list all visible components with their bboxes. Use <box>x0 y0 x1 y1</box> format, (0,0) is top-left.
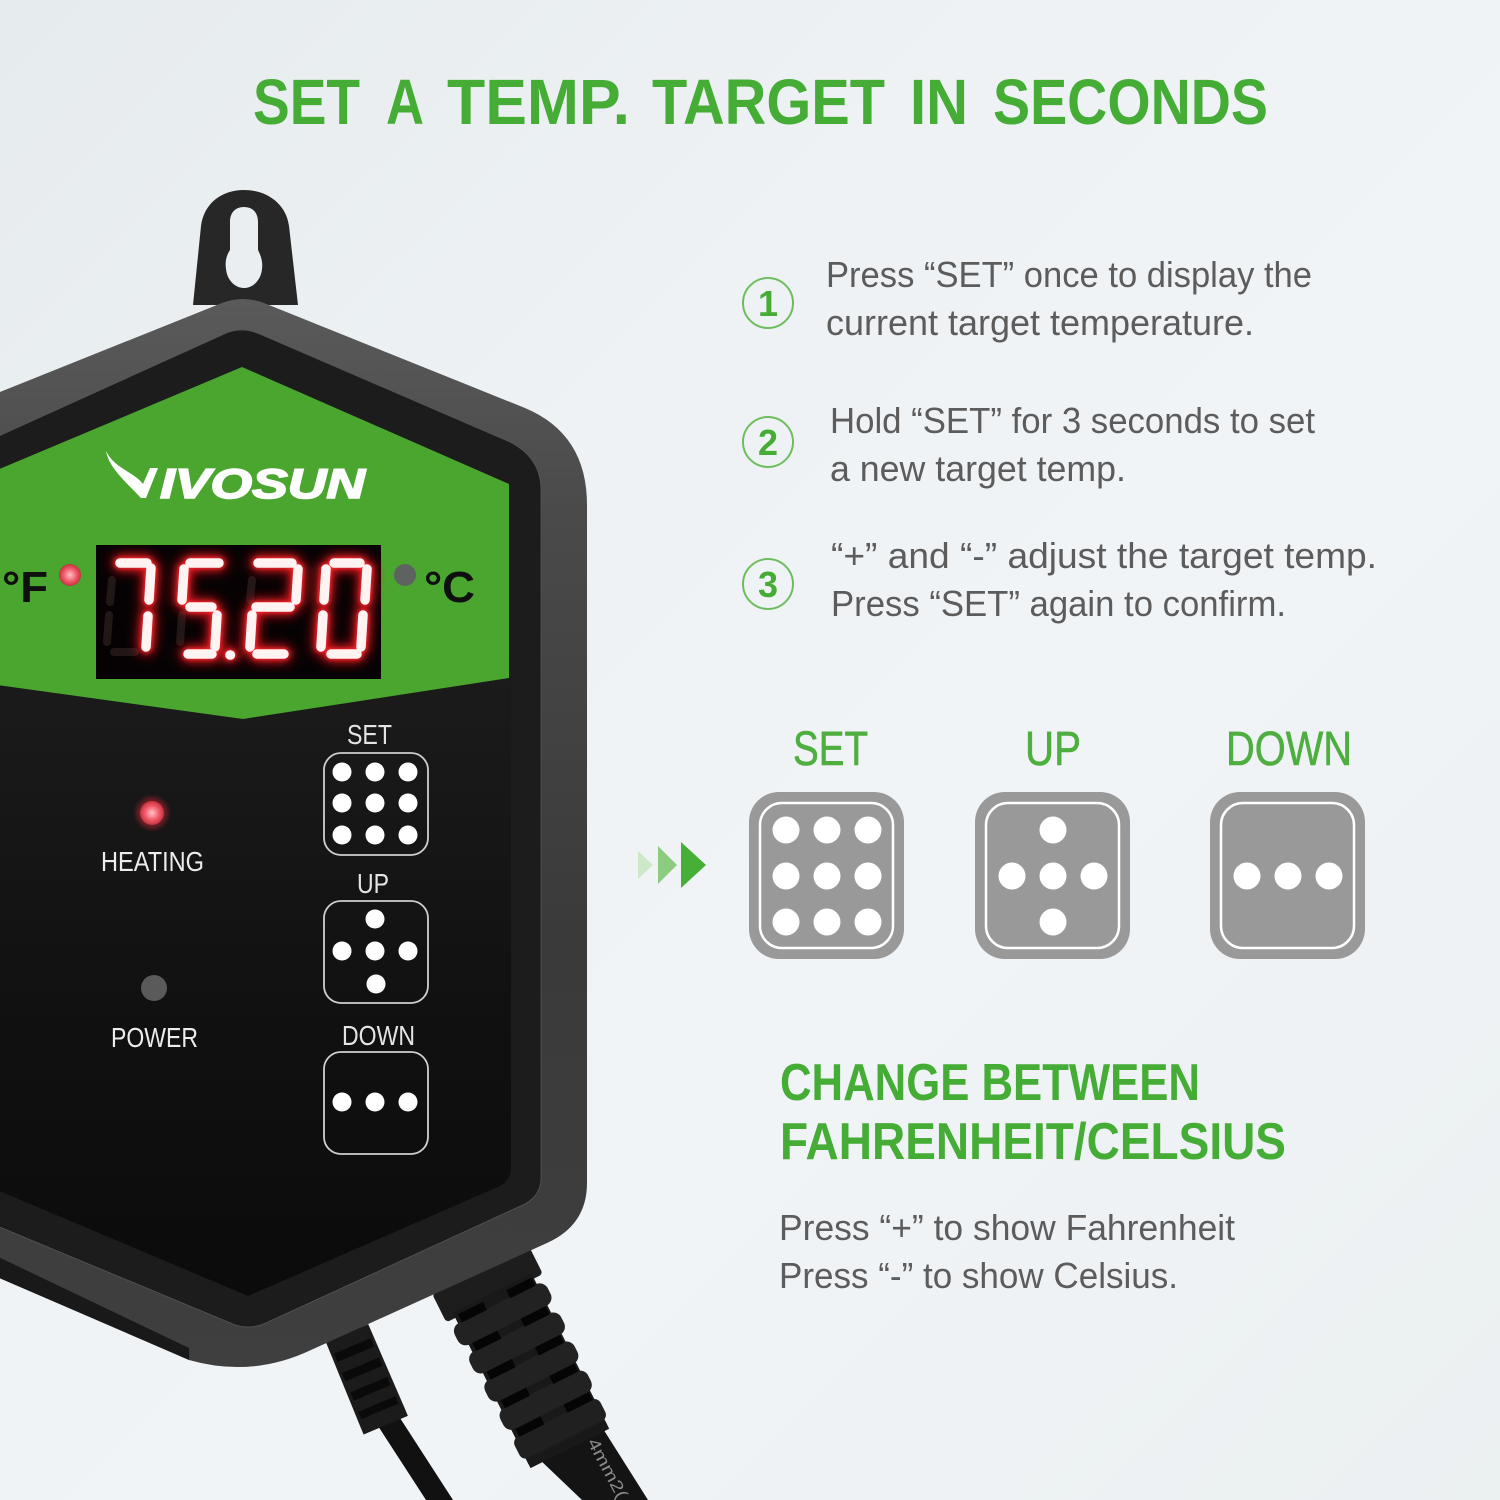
celsius unit: °C <box>424 563 475 612</box>
step 2 text: Hold “SET” for 3 seconds to set <box>830 400 1315 441</box>
step 3 text: Press “SET” again to confirm. <box>831 583 1286 624</box>
dark bezel <box>0 330 541 1327</box>
title: TARGET <box>652 66 885 138</box>
heating led <box>136 797 168 829</box>
black face <box>0 640 511 1296</box>
celsius led <box>394 564 416 586</box>
title: SET <box>253 66 360 138</box>
step 2 text: a new target temp. <box>830 448 1126 489</box>
power label: POWER <box>111 1022 198 1053</box>
cable marking: 4mm2( <box>583 1435 631 1500</box>
fahrenheit led <box>59 564 81 586</box>
heading: change units: FAHRENHEIT/CELSIUS <box>780 1113 1286 1171</box>
small cable <box>325 1324 453 1500</box>
up button icon <box>975 792 1130 959</box>
device up button <box>324 901 428 1003</box>
up caption: UP <box>1025 723 1081 776</box>
step 3 badge <box>743 559 793 609</box>
set caption: SET <box>793 723 868 776</box>
unit instructions: Press “+” to show Fahrenheit <box>779 1207 1235 1248</box>
device: thermostat controller <box>0 190 648 1500</box>
set button icon <box>749 792 904 959</box>
green panel <box>0 367 509 719</box>
digits 75.20 <box>120 563 367 655</box>
logo leaf <box>106 451 158 498</box>
step 1 text <box>826 254 1312 343</box>
hanging tab <box>193 190 298 305</box>
digit glow <box>120 563 367 655</box>
device up label: UP <box>357 868 389 899</box>
step 2 text <box>830 400 1315 489</box>
step 2 <box>743 400 1315 489</box>
unit instructions: Press “-” to show Celsius. <box>779 1255 1178 1296</box>
step 1 badge: 1 <box>758 283 778 324</box>
title: SECONDS <box>993 66 1268 138</box>
down caption: DOWN <box>1226 723 1352 776</box>
led display <box>96 545 381 679</box>
step 1 <box>743 254 1312 343</box>
device down label: DOWN <box>342 1020 415 1051</box>
device set label: SET <box>347 719 392 750</box>
step 3 text <box>831 535 1377 624</box>
outer shell <box>0 299 587 1367</box>
digit inner glow <box>120 563 367 655</box>
step 3 <box>743 535 1377 624</box>
step 2 badge: 2 <box>758 422 778 463</box>
heading: change units: CHANGE BETWEEN <box>780 1054 1200 1112</box>
heading: change units <box>780 1054 1286 1171</box>
heating label: HEATING <box>101 846 204 877</box>
step 3 badge: 3 <box>758 564 778 605</box>
title: A <box>386 66 424 138</box>
fahrenheit unit: °F <box>2 563 48 612</box>
power led <box>141 975 167 1001</box>
step 1 text: current target temperature. <box>826 302 1254 343</box>
unit instructions <box>779 1207 1235 1296</box>
device set button <box>324 753 428 855</box>
title: TEMP. <box>447 66 630 138</box>
step 1 badge <box>743 278 793 328</box>
large cable with strain relief <box>432 1245 648 1500</box>
triple arrow <box>638 842 706 888</box>
step 2 badge <box>743 417 793 467</box>
ghost segments <box>107 580 322 652</box>
side slot <box>0 1253 189 1360</box>
title: IN <box>910 66 968 138</box>
brand name: IVOSUN <box>160 460 367 507</box>
step 1 text: Press “SET” once to display the <box>826 254 1312 295</box>
brand logo <box>106 451 367 507</box>
device down button <box>324 1052 428 1154</box>
title <box>253 66 1268 138</box>
down button icon <box>1210 792 1365 959</box>
step 3 text: “+” and “-” adjust the target temp. <box>831 535 1377 576</box>
